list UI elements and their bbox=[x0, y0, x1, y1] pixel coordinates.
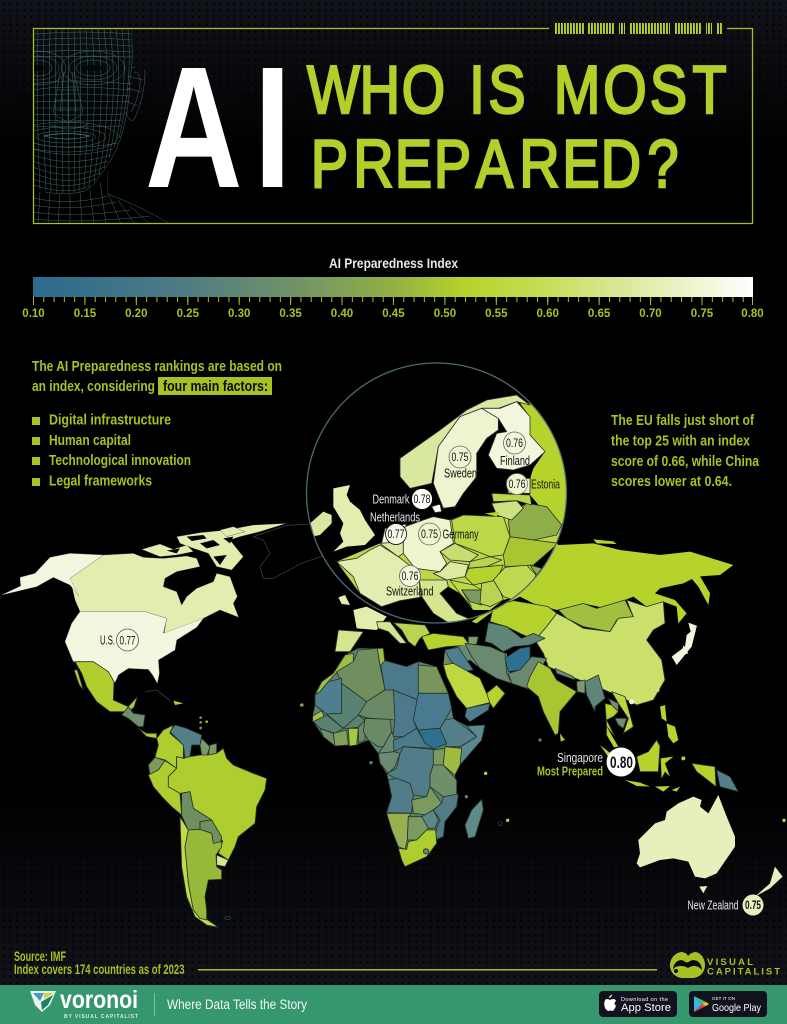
scale labels: 0.55 bbox=[485, 308, 508, 320]
Poland bbox=[452, 515, 510, 557]
Cameroon bbox=[378, 732, 395, 755]
country callouts bbox=[100, 432, 764, 916]
eyes of wireframe bbox=[34, 65, 106, 71]
Visual Capitalist logo bbox=[670, 952, 780, 978]
Sweden bbox=[433, 408, 498, 508]
Ethiopia bbox=[440, 718, 477, 747]
callout: Sweden bbox=[444, 446, 477, 480]
Angola bbox=[387, 778, 413, 813]
Russia in lens bbox=[520, 403, 566, 530]
Africa, South Asia and Oceania bbox=[300, 643, 786, 897]
Tanzania bbox=[430, 765, 457, 797]
Yemen bbox=[465, 703, 490, 722]
Denmark bbox=[432, 504, 442, 513]
Nigeria bbox=[363, 718, 392, 747]
callout: Switzerland bbox=[386, 566, 434, 598]
Iraq and Syria bbox=[445, 647, 473, 672]
ticks bbox=[33, 297, 753, 305]
callout: Switzerland: 0.76 bbox=[402, 569, 419, 583]
Pakistan bbox=[508, 657, 547, 690]
Romania bbox=[493, 565, 536, 600]
Chile bbox=[180, 817, 218, 927]
source rule bbox=[198, 969, 657, 970]
intro text block bbox=[32, 359, 282, 490]
Zimbabwe bbox=[422, 810, 438, 828]
Gabon and Congo bbox=[378, 752, 400, 773]
scale labels: 0.30 bbox=[228, 308, 250, 320]
Oman bbox=[487, 685, 505, 708]
Libya bbox=[381, 661, 418, 700]
Balkans base fragment bbox=[393, 623, 430, 647]
Brazil bbox=[168, 748, 267, 860]
Niger bbox=[358, 690, 396, 720]
Lithuania bbox=[492, 501, 523, 520]
callout: New Zealand: New Zealand bbox=[688, 898, 738, 912]
scale labels: 0.10 bbox=[22, 308, 45, 320]
small islands bbox=[199, 703, 303, 920]
Bolivia bbox=[182, 792, 212, 830]
Mauritania bbox=[315, 678, 342, 714]
callout: Denmark bbox=[372, 488, 432, 510]
scale labels: 0.60 bbox=[537, 308, 559, 320]
Austria bbox=[433, 562, 468, 580]
Kenya bbox=[443, 747, 462, 775]
Morocco bbox=[315, 653, 353, 695]
Taiwan bbox=[657, 685, 659, 692]
Visual Capitalist logo: VISUAL bbox=[707, 957, 753, 968]
Hungary bbox=[465, 565, 503, 585]
scale labels: 0.35 bbox=[279, 308, 302, 320]
title frame bbox=[34, 28, 752, 224]
Lesotho bbox=[423, 849, 429, 854]
callout: Sweden: Sweden bbox=[444, 466, 477, 480]
Kaliningrad bbox=[485, 512, 500, 517]
Myanmar bbox=[585, 675, 605, 712]
gaps in Canadian arctic bbox=[167, 535, 233, 565]
scale labels: 0.80 bbox=[741, 308, 764, 320]
Netherlands bbox=[382, 524, 406, 543]
Voronoi logo: voronoi bbox=[60, 986, 138, 1014]
source note: Source: IMF bbox=[14, 949, 66, 964]
China bbox=[535, 600, 665, 705]
Voronoi logo: BY VISUAL CAPITALIST bbox=[64, 1014, 138, 1020]
scale labels: 0.75 bbox=[691, 308, 714, 320]
Middle East underlay bbox=[443, 643, 512, 683]
callout: Switzerland: Switzerland bbox=[386, 584, 434, 598]
callout: United States: U.S. bbox=[100, 632, 115, 648]
France bbox=[337, 545, 420, 607]
callout: Netherlands bbox=[370, 510, 420, 544]
Afghanistan bbox=[505, 647, 530, 672]
contiguous United States bbox=[65, 612, 203, 683]
Borneo bbox=[637, 740, 660, 772]
Iran bbox=[465, 643, 512, 683]
Papua Indonesia bbox=[692, 763, 716, 787]
North America bbox=[2, 523, 325, 683]
callout: Germany: 0.75 bbox=[421, 527, 438, 541]
scale labels: 0.20 bbox=[125, 308, 147, 320]
Sudan bbox=[413, 693, 452, 730]
factor: Technological innovation: Technological innovation bbox=[49, 453, 191, 469]
Italy base fragment bbox=[377, 622, 407, 643]
Botswana bbox=[407, 817, 428, 840]
Sri Lanka bbox=[560, 733, 565, 742]
callout: Singapore most prepared: 0.80 bbox=[610, 753, 633, 772]
Tasmania bbox=[699, 886, 707, 893]
EU and China note: score of 0.66, while China bbox=[611, 454, 760, 470]
Germany bbox=[403, 517, 453, 572]
continental Europe underlay bbox=[337, 503, 562, 610]
Mali bbox=[327, 683, 367, 728]
callout: United States bbox=[100, 629, 138, 651]
barcode decoration bbox=[555, 23, 723, 34]
Korea bbox=[682, 645, 688, 655]
Central African Republic bbox=[393, 728, 433, 752]
Cambodia bbox=[615, 718, 627, 728]
Visual Capitalist logo: CAPITALIST bbox=[707, 966, 780, 978]
Tunisia bbox=[377, 648, 385, 665]
Belarus bbox=[508, 503, 562, 540]
West Africa bbox=[313, 711, 365, 746]
Africa landmass underlay bbox=[313, 648, 485, 867]
United Kingdom bbox=[333, 485, 375, 552]
Central America bbox=[122, 707, 145, 727]
Finland bbox=[482, 402, 545, 470]
New Zealand bbox=[755, 867, 783, 897]
Ireland bbox=[310, 512, 332, 537]
Latin America bbox=[74, 662, 303, 927]
France base fragment bbox=[353, 607, 387, 630]
callout: Finland: 0.76 bbox=[506, 436, 523, 450]
factor: Human capital: Human capital bbox=[49, 433, 131, 449]
Nepal and Bangladesh bbox=[555, 668, 575, 680]
intro line 2: an index, considering bbox=[32, 379, 155, 395]
Bosnia bbox=[462, 590, 482, 605]
gradient bar bbox=[33, 277, 753, 297]
South Africa bbox=[398, 830, 437, 867]
Czechia bbox=[440, 543, 478, 562]
Spain and Portugal bbox=[335, 630, 363, 652]
Norway bbox=[400, 395, 530, 488]
footer bar bbox=[0, 985, 787, 1024]
Mozambique bbox=[433, 794, 458, 840]
lens backdrop bbox=[306, 363, 566, 623]
Colombia bbox=[155, 725, 183, 768]
source note: Index covers 174 countries as of 2023 bbox=[14, 962, 185, 977]
Venezuela bbox=[170, 725, 202, 758]
Caucasus bbox=[468, 637, 478, 645]
callout: Singapore most prepared: Singapore bbox=[557, 750, 603, 765]
scale labels: 0.45 bbox=[382, 308, 405, 320]
Uganda bbox=[433, 748, 445, 765]
callout: United States: 0.77 bbox=[120, 634, 136, 648]
App Store badge bbox=[599, 991, 677, 1017]
Alaska bbox=[2, 553, 103, 596]
Croatia bbox=[450, 580, 482, 607]
factor: Legal frameworks: Legal frameworks bbox=[49, 474, 152, 490]
scale labels: 0.65 bbox=[588, 308, 611, 320]
Saudi Arabia bbox=[443, 663, 493, 708]
callout: Sweden: 0.75 bbox=[452, 450, 469, 464]
scale labels: 0.15 bbox=[74, 308, 97, 320]
legend title: AI Preparedness Index bbox=[329, 255, 458, 271]
Somalia bbox=[458, 725, 485, 765]
footer divider bbox=[154, 993, 155, 1016]
title word AI: AI bbox=[145, 31, 291, 224]
Voronoi logo bbox=[30, 986, 138, 1020]
callout: Denmark: Denmark bbox=[372, 492, 410, 506]
Greenland outline bbox=[253, 524, 325, 578]
Google Play badge: GET IT ON bbox=[712, 996, 735, 1001]
factor: Digital infrastructure: Digital infrastructure bbox=[49, 412, 171, 428]
Pacific and Indian Ocean islands bbox=[300, 699, 786, 826]
magnified Europe lens bbox=[310, 395, 577, 633]
Google Play badge: Google Play bbox=[712, 1002, 762, 1014]
EU and China note bbox=[611, 413, 760, 490]
Peru bbox=[148, 761, 182, 815]
Serbia bbox=[480, 580, 503, 607]
callout: Singapore most prepared: Most Prepared bbox=[537, 764, 603, 778]
Sulawesi bbox=[661, 757, 673, 778]
callout: Germany bbox=[418, 523, 479, 545]
EU and China note: the top 25 with an index bbox=[611, 434, 750, 450]
Turkmenistan and Uzbekistan bbox=[485, 623, 545, 652]
Laos bbox=[608, 698, 618, 712]
Algeria bbox=[337, 648, 385, 702]
Belgium bbox=[380, 542, 403, 557]
South Sudan bbox=[418, 728, 447, 749]
App Store badge: App Store bbox=[621, 1002, 671, 1014]
lens outline bbox=[306, 363, 566, 623]
scale labels: 0.40 bbox=[331, 308, 353, 320]
wireframe head illustration bbox=[34, 29, 168, 223]
world map bbox=[2, 363, 786, 927]
Australia bbox=[637, 795, 735, 878]
highlight: four main factors: four main factors: bbox=[163, 379, 268, 395]
Guyana and Suriname bbox=[200, 738, 210, 757]
Paraguay bbox=[200, 820, 222, 845]
Namibia bbox=[387, 813, 412, 849]
DR Congo bbox=[387, 747, 433, 797]
App Store badge: Download on the bbox=[621, 997, 668, 1003]
scale labels: 0.50 bbox=[434, 308, 456, 320]
legend: AI Preparedness Index colour scale bbox=[22, 255, 764, 320]
Japan bbox=[672, 623, 697, 665]
callout: New Zealand: 0.75 bbox=[745, 898, 761, 912]
Italy bbox=[420, 580, 469, 622]
callout: Netherlands: Netherlands bbox=[370, 510, 420, 524]
Vietnam bbox=[612, 692, 633, 733]
Mexico bbox=[74, 662, 137, 712]
Kazakhstan bbox=[490, 601, 557, 640]
Zambia bbox=[412, 787, 442, 815]
Canada bbox=[70, 523, 287, 633]
Chad bbox=[393, 690, 418, 737]
callout: Finland: Finland bbox=[500, 453, 530, 468]
source note bbox=[14, 949, 185, 977]
Egypt bbox=[418, 665, 448, 693]
scale labels: 0.70 bbox=[639, 308, 662, 320]
Slovakia bbox=[468, 557, 502, 568]
callout: Singapore most prepared bbox=[537, 748, 636, 778]
intro line 1: The AI Preparedness rankings are based on bbox=[32, 359, 282, 375]
Russia bbox=[472, 513, 733, 623]
Ukraine bbox=[503, 537, 558, 567]
callout: Estonia: 0.76 bbox=[508, 477, 526, 491]
title block bbox=[0, 23, 752, 224]
India bbox=[527, 662, 577, 735]
Java and lesser islands bbox=[625, 780, 680, 792]
Thailand bbox=[605, 703, 618, 737]
EU and China note: scores lower at 0.64. bbox=[611, 474, 732, 490]
Madagascar bbox=[465, 799, 483, 838]
Mongolia bbox=[558, 600, 633, 632]
Uruguay bbox=[217, 855, 228, 867]
scale labels bbox=[22, 308, 764, 320]
Argentina bbox=[185, 829, 222, 920]
Ecuador bbox=[148, 757, 165, 775]
Latvia bbox=[492, 493, 532, 505]
Philippines bbox=[660, 705, 678, 743]
callout: Finland bbox=[500, 432, 530, 468]
Turkey bbox=[422, 633, 470, 650]
title: PREPARED?: PREPARED? bbox=[311, 127, 678, 202]
callout: Estonia: Estonia bbox=[531, 476, 561, 492]
tagline: Where Data Tells the Story bbox=[167, 996, 307, 1012]
title: WHO IS MOST: WHO IS MOST bbox=[0, 53, 727, 128]
callout: Netherlands: 0.77 bbox=[388, 527, 405, 541]
UK base fragment bbox=[338, 595, 350, 605]
EU and China note: The EU falls just short of bbox=[611, 413, 754, 429]
Eurasia base map bbox=[335, 513, 733, 705]
Kamchatka bbox=[690, 573, 710, 605]
Estonia bbox=[507, 478, 530, 493]
Papua New Guinea bbox=[717, 770, 738, 792]
scale labels: 0.25 bbox=[177, 308, 200, 320]
Google Play badge bbox=[689, 991, 767, 1017]
callout: Denmark: 0.78 bbox=[414, 492, 431, 506]
Malaysia and Sumatra bbox=[607, 727, 618, 747]
callout: Germany: Germany bbox=[442, 526, 479, 542]
callout: Estonia bbox=[506, 474, 561, 494]
Moldova bbox=[530, 565, 542, 575]
